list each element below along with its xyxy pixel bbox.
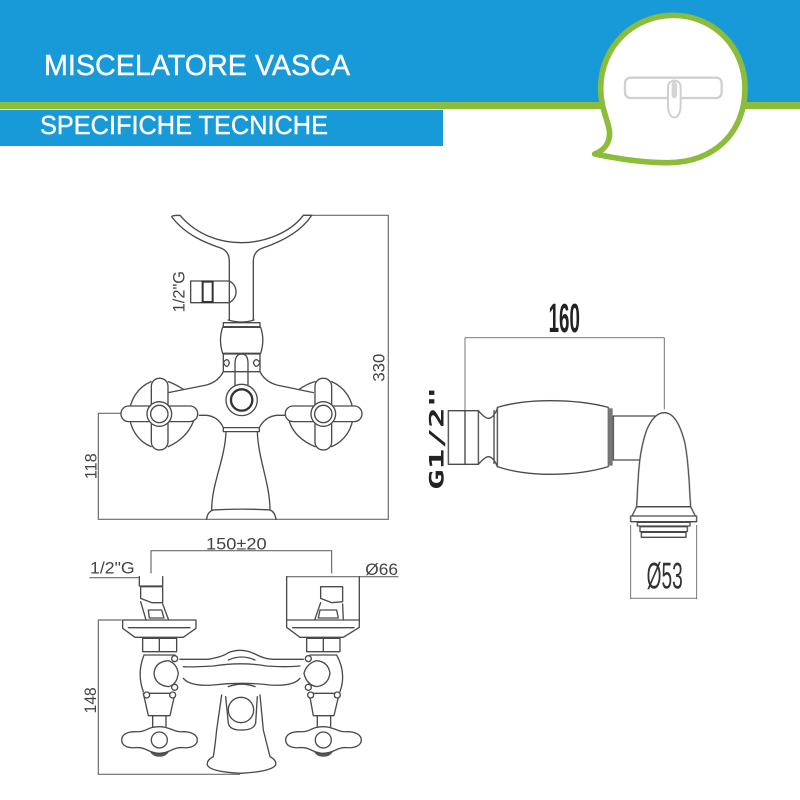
dimension 160 lines (465, 338, 664, 465)
right handle (285, 378, 362, 450)
handle ring (608, 408, 613, 466)
shower head (637, 413, 691, 507)
drawing: top view of mixer (81, 534, 398, 774)
label 150±20: 150±20 (206, 534, 267, 553)
shower head flange (631, 507, 697, 537)
drawing: front view of mixer (82, 215, 389, 519)
icon: lever highlight (672, 82, 677, 98)
left handle (121, 378, 198, 450)
header band (0, 0, 800, 102)
mixer body (168, 354, 313, 428)
label 1/2"G: 1/2"G (170, 271, 189, 312)
right oval (304, 661, 330, 687)
central outlet circle (228, 697, 254, 723)
subtitle: SPECIFICHE TECNICHE (40, 110, 328, 140)
label Ø53: Ø53 (647, 557, 683, 597)
left flange (123, 620, 196, 637)
side outlet nut (203, 282, 213, 302)
label Ø66: Ø66 (365, 560, 398, 579)
crossbar (180, 650, 303, 687)
subtitle bar (0, 110, 443, 146)
icon: mixer bar (625, 78, 722, 98)
label 118: 118 (82, 453, 101, 479)
label 330: 330 (370, 354, 389, 382)
right flange line (293, 626, 354, 630)
central outlet rings (226, 384, 257, 416)
green divider (0, 102, 800, 109)
central collar (220, 320, 263, 372)
pedestal (207, 428, 276, 519)
shower cradle (172, 215, 312, 320)
handle barrel (494, 401, 608, 474)
icon: mixer lever (668, 81, 681, 117)
label G1/2": G1/2" (425, 387, 448, 490)
neck (613, 416, 657, 460)
title: MISCELATORE VASCA (44, 50, 351, 82)
pedestal (207, 695, 276, 773)
speech bubble icon (595, 15, 745, 163)
side outlet (191, 281, 236, 303)
dimension lines (89, 551, 398, 774)
left connector (139, 577, 169, 620)
left oval (154, 661, 178, 687)
central outlet inner ring (231, 389, 252, 411)
right handle (286, 727, 361, 757)
connector (448, 408, 497, 467)
label 160: 160 (549, 295, 580, 341)
drawing: hand shower side view (425, 295, 697, 599)
label 1/2"G: 1/2"G (90, 558, 135, 577)
left handle (122, 727, 197, 757)
dimension 330 and 118 lines (98, 215, 388, 519)
nuts and valve bodies (140, 638, 343, 727)
dimension 53 lines (631, 525, 697, 599)
label 148: 148 (81, 687, 100, 713)
right connector (287, 577, 359, 637)
joint dots (144, 656, 340, 698)
